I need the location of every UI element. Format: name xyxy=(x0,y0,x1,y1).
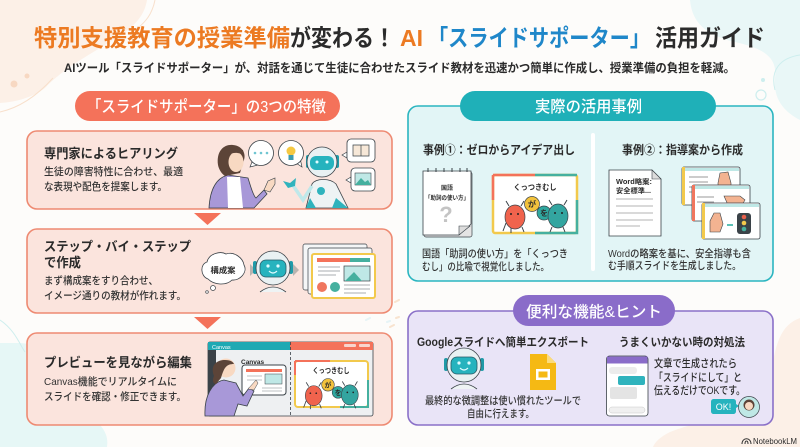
icon: avatar xyxy=(738,396,760,418)
title xyxy=(34,24,765,51)
text: case 2 xyxy=(608,247,751,272)
icon: chat window xyxy=(606,356,648,416)
title: 「スライドサポーター」 xyxy=(428,25,650,51)
panel: feature 2 step by step xyxy=(27,229,392,313)
heading pill: case studies xyxy=(460,91,716,121)
icon: slide stack xyxy=(303,244,375,298)
text: export: 最終的な微調整は使い慣れたツールで xyxy=(425,394,581,407)
slide: kuttsuki mushi xyxy=(295,361,368,409)
icon: teacher xyxy=(209,145,275,208)
arrow: to robot xyxy=(250,264,256,276)
text: hearing xyxy=(44,165,183,193)
text: preview: Canvas機能でリアルタイムに xyxy=(44,375,177,388)
text: case 1 xyxy=(422,247,568,273)
icon: image card xyxy=(346,168,375,191)
text: case 2: む手順スライドを生成しました。 xyxy=(608,259,741,272)
icon: speech bubbles xyxy=(248,140,304,167)
icon: draft cloud: 構成案 xyxy=(210,265,236,275)
icon: robot xyxy=(444,348,484,389)
title: 特別支援教育の授業準備 xyxy=(34,25,290,51)
text: troubleshooting: 「スライドにして」と xyxy=(654,371,742,384)
text: preview: スライドを確認・修正できます。 xyxy=(44,390,186,403)
heading: step by step: ステップ・バイ・ステップ xyxy=(44,239,191,254)
heading pill: features xyxy=(75,91,340,121)
icon: notebook: 国語 xyxy=(441,185,453,192)
text: troubleshooting: 伝えるだけでOKです。 xyxy=(654,384,745,397)
heading pill: features: 「スライドサポーター」の3つの特徴 xyxy=(87,98,326,116)
illustration: canvas window: Canvas xyxy=(241,359,265,366)
text: case 1: 国語「助詞の使い方」を「くっつき xyxy=(422,247,568,260)
text: hearing: 生徒の障害特性に合わせ、最適 xyxy=(44,165,183,178)
arrow: to slides xyxy=(293,264,299,276)
heading: case 1: 事例①：ゼロからアイデア出し xyxy=(423,142,575,157)
icon: word document xyxy=(609,170,661,236)
heading pill: tips xyxy=(513,295,675,326)
icon: book card xyxy=(342,139,375,162)
heading pill: tips: 便利な機能&ヒント xyxy=(526,303,662,321)
arrow: feature 1 to 2 xyxy=(194,213,221,225)
text: export xyxy=(425,394,581,420)
panel: feature 3 preview xyxy=(27,333,392,425)
icon: teacher pointing xyxy=(205,358,258,416)
icon: robot xyxy=(283,147,348,208)
callout: OK: OK! xyxy=(716,402,731,412)
text: step by step: まず構成案をすり合わせ、 xyxy=(44,274,158,287)
heading: hearing: 専門家によるヒアリング xyxy=(44,146,178,161)
arrow: feature 2 to 3 xyxy=(194,317,221,329)
title: が変わる！ xyxy=(290,24,395,51)
panel: feature 1 hearing xyxy=(27,131,392,209)
text: step by step xyxy=(44,274,186,302)
text: troubleshooting xyxy=(654,356,745,397)
text: hearing: な表現や配色を提案します。 xyxy=(44,180,167,193)
text: troubleshooting: 文章で生成されたら xyxy=(654,356,737,370)
heading: step by step xyxy=(44,239,191,270)
heading: troubleshooting: うまくいかない時の対処法 xyxy=(619,335,745,349)
illustration: canvas window xyxy=(205,342,373,416)
text: step by step: イメージ通りの教材が作れます。 xyxy=(44,289,186,302)
title: AI xyxy=(400,25,423,51)
illustration: canvas window: Canvas xyxy=(212,345,231,351)
subtitle: AIツール「スライドサポーター」が、対話を通じて生徒に合わせたスライド教材を迅速かつ簡単に作成し、授業準備の負担を軽減。 xyxy=(64,60,735,75)
illustration: procedure slides xyxy=(682,167,760,239)
icon: notebook xyxy=(423,168,472,237)
icon: draft cloud xyxy=(202,253,245,293)
text: case 2: Wordの略案を基に、安全指導も含 xyxy=(608,247,751,260)
illustration: kuttsuki mushi slide xyxy=(493,175,577,233)
heading: step by step: で作成 xyxy=(44,255,81,270)
title: 活用ガイド xyxy=(655,25,765,51)
text: case 1: むし」の比喩で視覚化しました。 xyxy=(422,260,549,273)
panel: tips xyxy=(408,295,773,425)
icon: notebook: 「助詞の使い方」 xyxy=(425,194,469,202)
icon: word document: 安全標準... xyxy=(616,186,651,195)
icon: google slides xyxy=(530,354,556,390)
heading pill: case studies: 実際の活用事例 xyxy=(535,98,642,116)
icon: robot xyxy=(253,251,293,292)
callout: OK xyxy=(711,399,739,414)
illustration: kuttsuki mushi slide: くっつきむし xyxy=(514,183,556,192)
slide: kuttsuki mushi: くっつきむし xyxy=(312,366,350,375)
text: export: 自由に行えます。 xyxy=(467,407,534,420)
text: preview xyxy=(44,375,186,403)
heading: export: Googleスライドへ簡単エクスポート xyxy=(417,335,589,349)
panel: case studies xyxy=(408,91,773,281)
icon: word document: Word略案: xyxy=(616,177,652,186)
icon: notebook: ? xyxy=(439,202,453,227)
logo: NotebookLM: NotebookLM xyxy=(753,436,797,446)
heading: case 2: 事例②：指導案から作成 xyxy=(622,142,743,157)
heading: preview: プレビューを見ながら編集 xyxy=(44,355,192,370)
